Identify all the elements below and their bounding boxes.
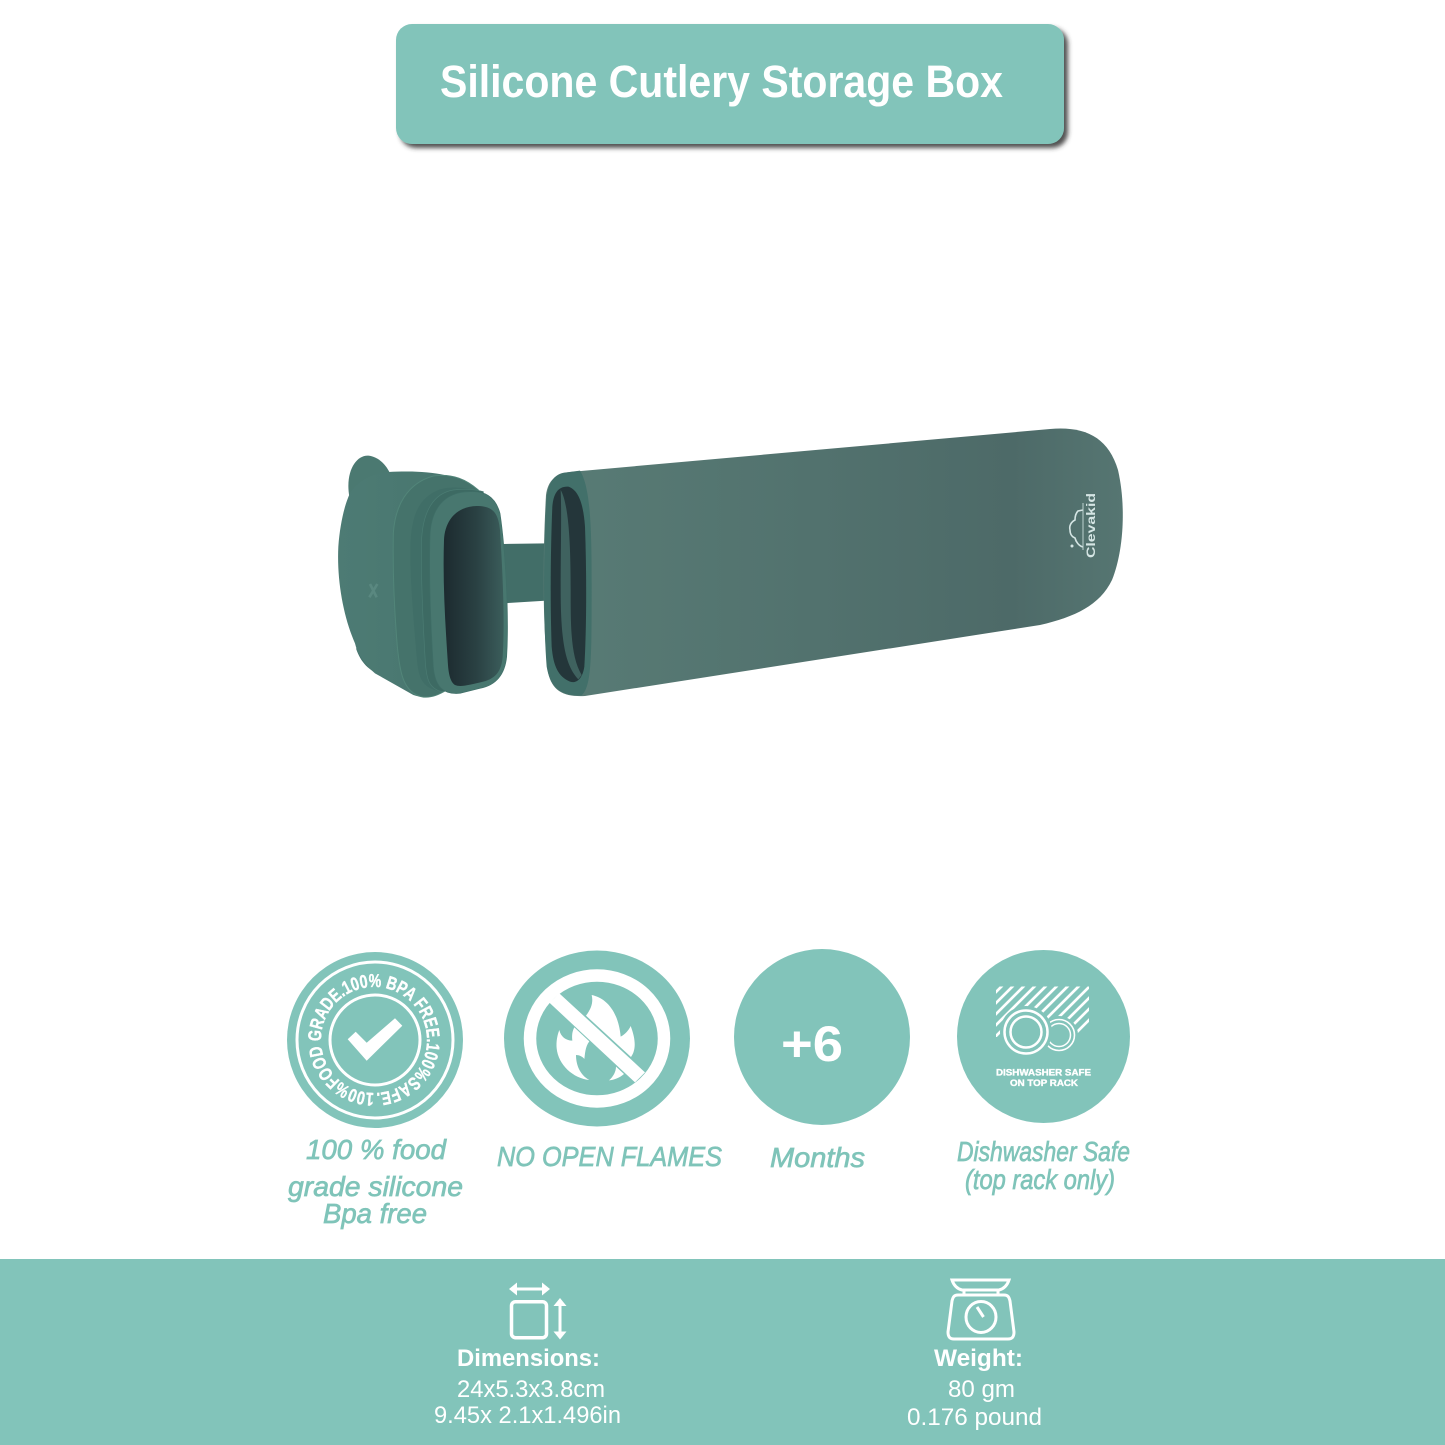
caption: food grade: Bpa free bbox=[323, 1198, 427, 1229]
box rim bbox=[544, 471, 592, 695]
dimensions heading: Dimensions: bbox=[457, 1345, 600, 1372]
caption: food grade: 100 % food bbox=[306, 1134, 447, 1165]
cap and strap, drawn in 3x crop coordinates bbox=[338, 456, 547, 697]
badge label: DISHWASHER SAFE bbox=[996, 1068, 1091, 1078]
brand logo: Clevakid bbox=[1086, 493, 1098, 558]
badge: +6 months bbox=[734, 949, 910, 1125]
cap flange bbox=[393, 475, 493, 697]
caption: dishwasher safe: (top rack only) bbox=[965, 1164, 1115, 1195]
water stripes bbox=[996, 986, 1089, 1037]
cap body bbox=[338, 471, 507, 697]
dimensions values: 9.45x 2.1x1.496in bbox=[434, 1402, 621, 1429]
badge: dishwasher safe bbox=[957, 950, 1130, 1123]
caption: no open flames: NO OPEN FLAMES bbox=[497, 1141, 722, 1172]
box rim and opening, drawn in 3x crop coordinates bbox=[544, 471, 592, 695]
cap rim bbox=[430, 492, 507, 694]
cap opening bbox=[444, 506, 504, 686]
caption: dishwasher safe bbox=[957, 1136, 1130, 1195]
connecting strap bbox=[503, 543, 547, 603]
flame lower left bbox=[556, 1027, 589, 1080]
bottom specification band bbox=[0, 1259, 1445, 1445]
title text: Silicone Cutlery Storage Box bbox=[440, 56, 1003, 107]
check mark bbox=[348, 1018, 402, 1061]
dimensions values: 24x5.3x3.8cm bbox=[457, 1376, 605, 1403]
caption: dishwasher safe: Dishwasher Safe bbox=[957, 1136, 1130, 1167]
box body bbox=[544, 429, 1123, 696]
caption: months: Months bbox=[770, 1142, 865, 1173]
circular badge text: 100%FOOD GRADE.100% BPA FREE.100%SAFE. bbox=[308, 974, 440, 1106]
box opening bbox=[551, 487, 586, 682]
caption: food grade: grade silicone bbox=[288, 1171, 463, 1202]
badge label: ON TOP RACK bbox=[1010, 1078, 1079, 1088]
plates bbox=[1000, 1006, 1078, 1058]
icon: kitchen scale bbox=[948, 1280, 1014, 1339]
box inner ledge bbox=[561, 490, 582, 679]
flame lower right bbox=[609, 1067, 624, 1080]
caption: food grade bbox=[288, 1134, 463, 1229]
weight values bbox=[907, 1376, 1042, 1431]
icon: dimensions bbox=[509, 1282, 566, 1340]
cap ear bottom bbox=[356, 648, 388, 674]
cap face mark bbox=[369, 584, 377, 597]
brand logo bbox=[1070, 493, 1098, 558]
flame upper bbox=[586, 995, 635, 1057]
title banner bbox=[396, 24, 1064, 144]
prohibition slash bbox=[549, 993, 645, 1082]
cap ear top bbox=[348, 456, 391, 500]
weight values: 80 gm bbox=[948, 1376, 1015, 1403]
icon: no open flames bbox=[504, 950, 690, 1126]
cap groove bbox=[410, 488, 493, 691]
cap step bbox=[421, 489, 493, 692]
dimensions values bbox=[434, 1376, 621, 1429]
flame and slash, drawn in 3x crop coordinates bbox=[549, 993, 645, 1082]
age number: +6 bbox=[781, 1016, 843, 1072]
badge: 100% food grade bbox=[287, 952, 463, 1128]
badge label bbox=[996, 1068, 1091, 1088]
weight heading: Weight: bbox=[934, 1345, 1023, 1372]
weight values: 0.176 pound bbox=[907, 1404, 1042, 1431]
product photo: silicone cutlery box bbox=[338, 429, 1123, 697]
